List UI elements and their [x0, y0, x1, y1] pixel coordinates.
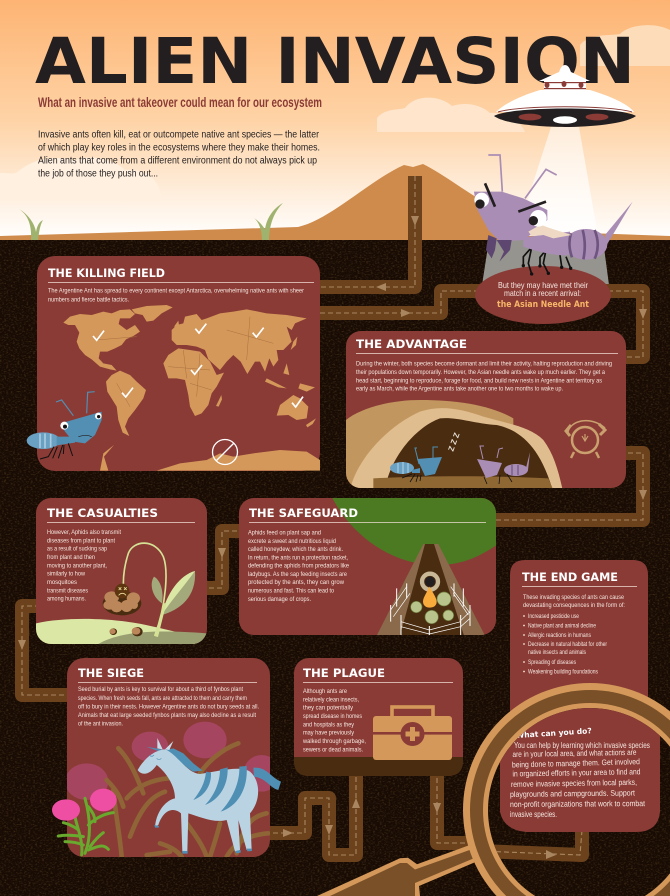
icon: alarm clock: [566, 421, 605, 458]
cloud: top right: [580, 25, 670, 66]
text: safeguard: excrete a sweet and nutritious liquid: [248, 538, 336, 545]
text: what can you do: non-profit organizations that work to combat: [510, 799, 646, 809]
intro text: of which play key roles in the ecosystems where they make their homes.: [38, 142, 320, 154]
text: siege: Animals that eat large seeded fynbos plants may also decline as a result: [78, 712, 256, 719]
text: what can you do: remove invasive species from local parks,: [511, 778, 637, 789]
text: safeguard: ladybugs. As the sap feeding insects are: [248, 571, 347, 578]
text: end game: Native plant and animal decline: [528, 622, 596, 630]
grass left: [19, 209, 43, 241]
cloud: middle: [377, 98, 525, 132]
text: killing field: numbers and fierce battle tactics.: [48, 296, 129, 304]
panel: the safeguard: [239, 497, 497, 636]
intro text: Alien ants that come from a different environment do not always pick up: [38, 156, 317, 166]
intro text: the job of those they push out...: [38, 168, 158, 180]
text: plague: [302, 688, 366, 753]
callout: asian needle ant: the Asian Needle Ant: [497, 300, 590, 310]
icon: blue ant: [27, 392, 102, 459]
panel: what can you do: [500, 700, 660, 832]
text: siege: species. When fresh seeds fall, ants are attracted to them and carry them: [78, 695, 247, 702]
text: end game: Increased pesticide use: [528, 613, 579, 620]
cloud: left: [0, 158, 162, 201]
text: what can you do: [510, 741, 650, 819]
text: advantage: [356, 360, 612, 392]
text: end game: These invading species of ants can cause: [523, 594, 624, 601]
text: casualties: transmit diseases: [47, 587, 89, 594]
intro text: [38, 130, 320, 180]
text: advantage: early as March, while the Argentine ants take another one to two months to wake up.: [356, 386, 563, 392]
UFO beam: [516, 127, 598, 236]
text: plague: may have previously: [303, 730, 355, 737]
panel: the plague: [294, 658, 463, 776]
text: casualties: similarly to how: [47, 571, 85, 578]
icon: pink protea flowers: [52, 789, 117, 855]
text: plague: and hospitals as they: [303, 721, 355, 728]
text: safeguard: In return, the ants run a protection racket,: [248, 554, 348, 561]
callout: asian needle ant: [475, 266, 611, 324]
world map: [63, 305, 320, 471]
illustration: background fynbos: [65, 722, 280, 857]
panel: the end game: [510, 560, 648, 730]
text: end game: Decrease in natural habitat for other: [528, 641, 608, 648]
text: casualties: mosquitoes: [47, 579, 78, 586]
underground soil: [0, 240, 670, 896]
text: safeguard: defending the aphids from predators like: [248, 563, 349, 570]
heading: the killing field: THE KILLING FIELD: [48, 266, 165, 280]
text: plague: sewers or dead animals.: [303, 746, 363, 753]
text: advantage: During the winter, both species become dormant and limit their activity, halting reproduction and driving: [356, 360, 612, 368]
icon: zebra: [138, 738, 281, 854]
illustration: tree and fence: [332, 497, 497, 636]
text: what can you do: invasive species.: [510, 810, 557, 819]
text: advantage: their populations down temporarily. However, the Asian needle ants wake up much earlier. They get a: [356, 369, 605, 376]
text: plague: Although ants are: [303, 688, 347, 695]
text: zzz: Z Z Z: [447, 431, 462, 453]
heading: the end game: THE END GAME: [522, 570, 618, 584]
text: safeguard: called honeydew, which the ants drink.: [248, 546, 343, 553]
text: siege: of the ant invasion.: [78, 720, 123, 727]
text: plague: spread disease in homes: [303, 713, 363, 720]
text: end game: devastating consequences in the form of:: [523, 602, 625, 609]
text: safeguard: Aphids feed on plant sap and: [248, 530, 321, 536]
text: casualties: as a result of sucking sap: [47, 546, 107, 553]
icon: medical case: [373, 707, 452, 760]
sky background: [0, 0, 670, 240]
title: ALIEN INVASION: [35, 25, 635, 98]
text: safeguard: serious damage of crops.: [248, 596, 311, 603]
callout: asian needle ant: match in a recent arrival:: [504, 289, 581, 298]
text: end game: native insects and animals: [528, 649, 587, 656]
text: killing field: [48, 288, 305, 304]
text: siege: Seed burial by ants is key to survival for about a third of fynbos plant: [78, 686, 243, 693]
text: siege: [78, 686, 259, 727]
subtitle: What an invasive ant takeover could mean for our ecosystem: [38, 95, 322, 110]
text: casualties: However, Aphids also transmit: [47, 529, 121, 536]
text: end game: [523, 594, 625, 676]
text: plague: relatively clean insects,: [303, 696, 359, 703]
icon: sleeping blue ant: [390, 447, 442, 482]
mountain: [0, 164, 670, 241]
intro text: Invasive ants often kill, eat or outcompete native ant species — the latter: [38, 130, 320, 140]
text: what can you do: in organized efforts in your area to find and: [512, 767, 641, 778]
text: killing field: The Argentine Ant has spread to every continent except Antarctica, overwhelming native ants with sheer: [48, 288, 305, 294]
text: siege: off to bury in their nests. However Argentine ants do not bury seeds at all.: [78, 703, 259, 710]
checkmarks on map: [93, 324, 303, 407]
icon: no ants in Antarctica: [212, 440, 238, 464]
tunnel network: [18, 176, 647, 855]
grass right: [254, 203, 283, 241]
text: casualties: moving to another plant,: [47, 562, 107, 569]
text: end game: Spreading of diseases: [528, 659, 577, 666]
heading: what can you do: What can you do?: [516, 726, 592, 740]
icon: purple asian needle ant: [474, 155, 633, 276]
heading: the safeguard: THE SAFEGUARD: [249, 506, 358, 520]
illustration: underground nest: [346, 400, 563, 490]
heading: the siege: THE SIEGE: [78, 666, 144, 680]
heading: the plague: THE PLAGUE: [303, 666, 385, 680]
text: what can you do: playgrounds and campgrounds. Support: [510, 788, 636, 799]
text: what can you do: being done to manage them. Get involved: [512, 757, 640, 769]
magnifying glass lens: [463, 683, 670, 896]
heading: the advantage: THE ADVANTAGE: [356, 337, 467, 351]
text: advantage: head start, beginning to reproduce, forage for food, and build new nests in Argentine ant territory as: [356, 378, 603, 384]
callout: asian needle ant: But they may have met their: [498, 281, 588, 290]
text: casualties: from plant and then: [47, 554, 95, 561]
icon: UFO: [494, 65, 636, 127]
text: safeguard: numerous and fast. This can lead to: [248, 588, 334, 594]
text: casualties: [47, 529, 121, 603]
icon: sleeping purple ant: [477, 446, 530, 484]
panel: the advantage: [346, 331, 626, 490]
beam underground: [482, 240, 609, 285]
magnifying glass handle: [317, 842, 492, 896]
text: safeguard: protected by the ants, they can grow: [248, 579, 344, 586]
panel: the siege: [52, 658, 281, 857]
text: end game: Allergic reactions in humans: [528, 632, 592, 639]
illustration: wilted plant: [36, 543, 207, 645]
panel: the killing field: [27, 256, 320, 471]
text: end game: Weakening building foundations: [528, 668, 599, 676]
text: casualties: among humans.: [47, 596, 86, 603]
text: casualties: diseases from plant to plant: [47, 537, 115, 544]
text: plague: they can potentially: [303, 705, 354, 712]
text: what can you do: are in your local area, and what actions are: [512, 748, 637, 759]
text: safeguard: [248, 530, 349, 603]
text: plague: walked through garbage,: [302, 738, 366, 745]
heading: the casualties: THE CASUALTIES: [47, 506, 158, 520]
tunnel inside lens: [494, 832, 589, 862]
panel: the casualties: [36, 498, 207, 645]
